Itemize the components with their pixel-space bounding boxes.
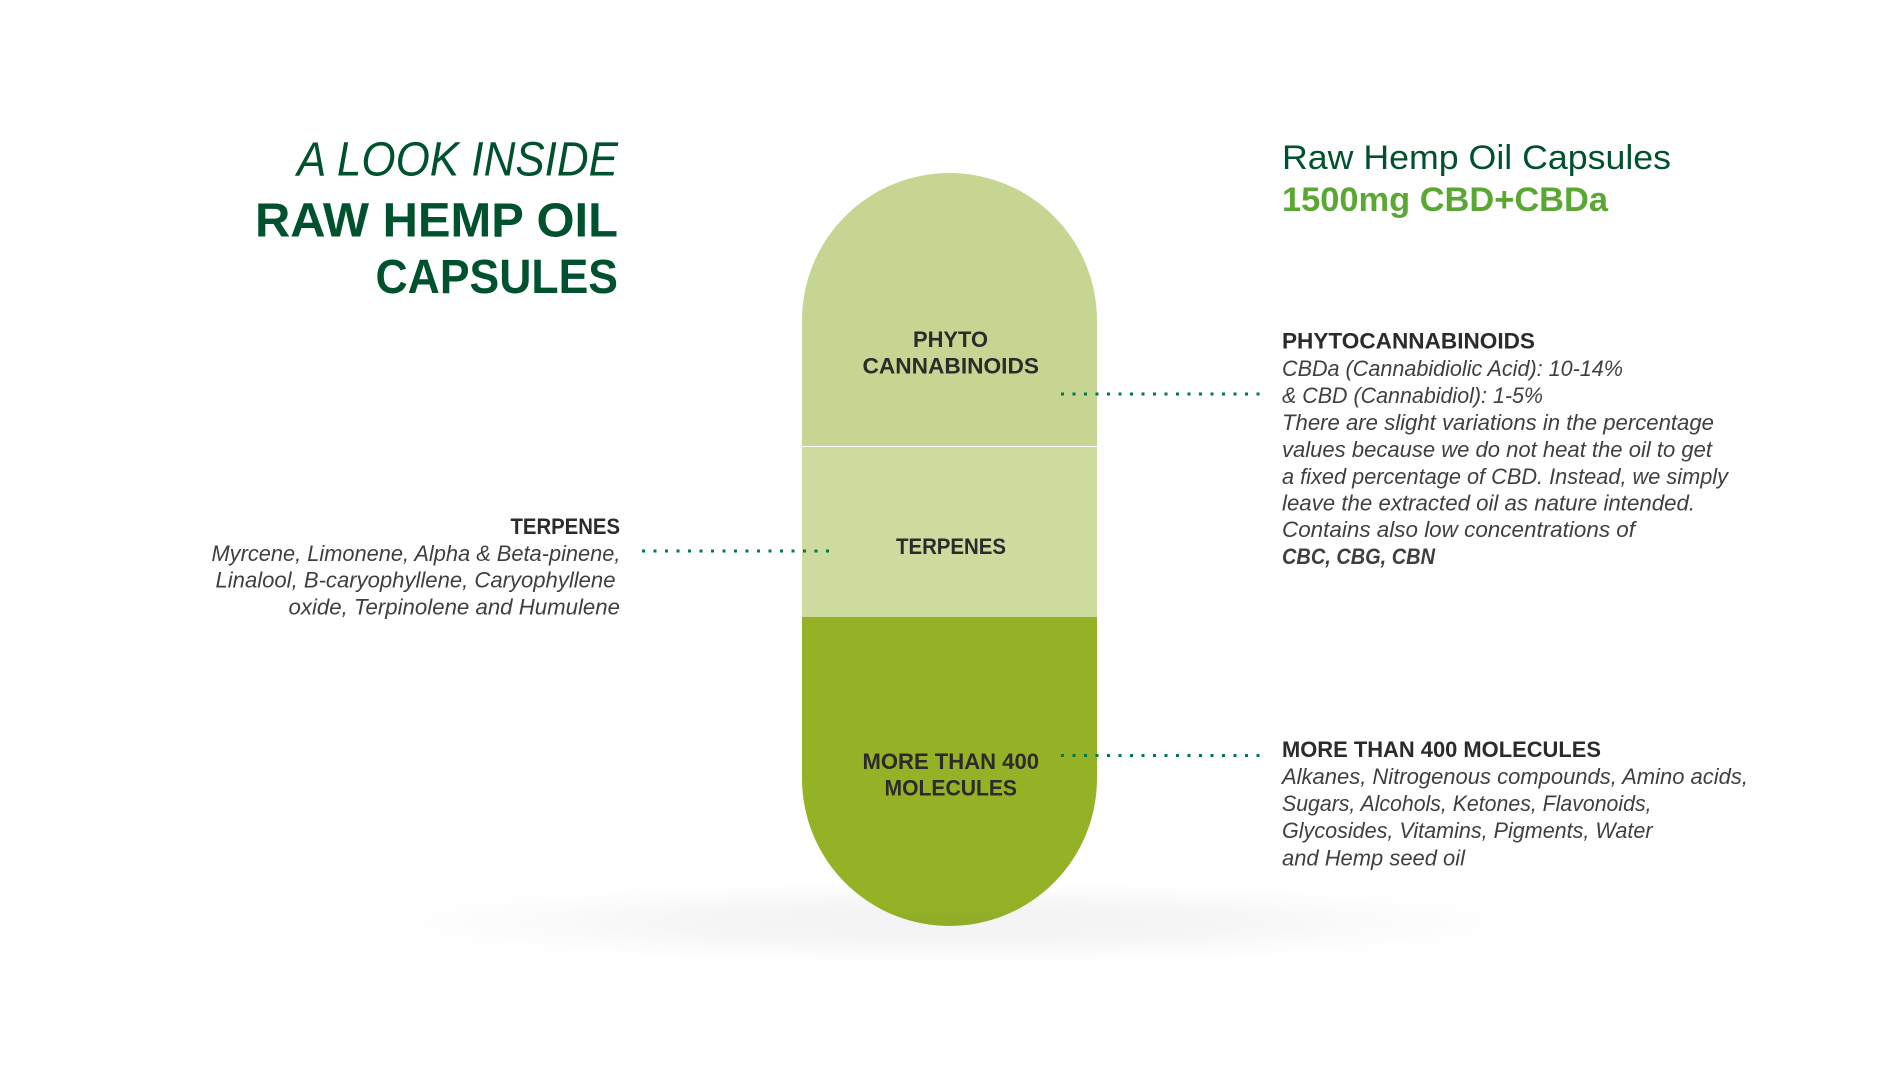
text block: terpenes: oxide, Terpinolene and Humulene [288,594,620,620]
text block: more than 400 molecules: MORE THAN 400 MOLECULES [1282,737,1601,762]
title [255,134,619,304]
text block: more than 400 molecules: Sugars, Alcohols, Ketones, Flavonoids, [1282,791,1652,816]
capsule label: phyto cannabinoids: CANNABINOIDS [862,354,1039,378]
text block: phytocannabinoids: Contains also low concentrations of [1282,517,1638,542]
title: RAW HEMP OIL [255,194,618,248]
capsule label: terpenes: TERPENES [896,534,1006,559]
title: CAPSULES [376,251,618,304]
text block: phytocannabinoids: & CBD (Cannabidiol): 1-5% [1282,383,1543,408]
text block: phytocannabinoids: CBDa (Cannabidiolic Acid): 10-14% [1282,356,1623,381]
text block: terpenes: Linalool, B-caryophyllene, Caryophyllene [216,568,616,592]
product heading: 1500mg CBD+CBDa [1282,181,1609,219]
text block: phytocannabinoids: leave the extracted oil as nature intended. [1282,490,1695,516]
text block: terpenes: TERPENES [510,514,620,539]
dotted connector: phytocannabinoids [1061,392,1260,396]
text block: phytocannabinoids [1282,328,1730,569]
capsule segment: phytocannabinoids [802,173,1097,446]
title: A LOOK INSIDE [294,134,619,186]
text block: more than 400 molecules: Alkanes, Nitrogenous compounds, Amino acids, [1280,764,1748,789]
text block: phytocannabinoids: a fixed percentage of CBD. Instead, we simply [1282,464,1730,489]
capsule segment: more than 400 molecules [802,617,1097,926]
capsule shadow [365,881,1545,965]
capsule label: phyto cannabinoids: PHYTO [913,327,988,352]
capsule label: more than 400 molecules [862,749,1039,800]
text block: phytocannabinoids: CBC, CBG, CBN [1282,544,1436,569]
dotted connector: molecules [1061,754,1260,757]
capsule label: phyto cannabinoids [862,327,1039,378]
text block: more than 400 molecules: and Hemp seed oil [1282,846,1466,870]
dotted connector: terpenes [642,550,829,552]
product heading: Raw Hemp Oil Capsules [1282,139,1671,177]
product heading [1282,139,1671,219]
capsule [802,173,1097,926]
text block: more than 400 molecules: Glycosides, Vitamins, Pigments, Water [1282,818,1654,843]
text block: terpenes [212,514,620,620]
capsule label: more than 400 molecules: MOLECULES [884,776,1017,800]
text block: phytocannabinoids: PHYTOCANNABINOIDS [1282,328,1535,354]
text block: phytocannabinoids: There are slight variations in the percentage [1282,410,1714,435]
capsule segment: terpenes [802,447,1097,618]
text block: more than 400 molecules [1280,737,1748,870]
text block: phytocannabinoids: values because we do not heat the oil to get [1282,437,1713,462]
text block: terpenes: Myrcene, Limonene, Alpha & Beta-pinene, [212,541,620,566]
capsule label: more than 400 molecules: MORE THAN 400 [862,749,1039,774]
